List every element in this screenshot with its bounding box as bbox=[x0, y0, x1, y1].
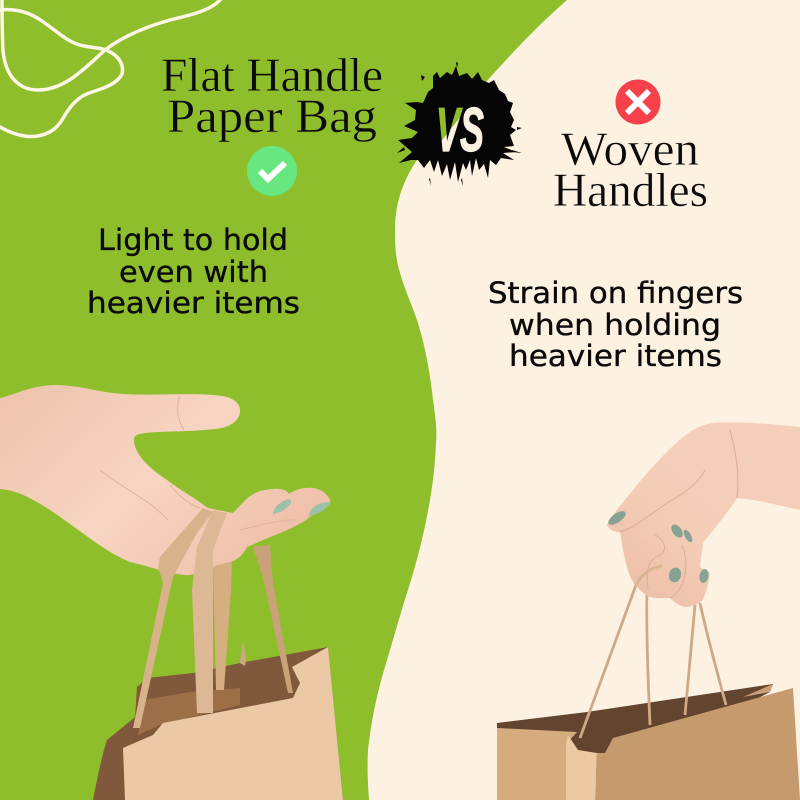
rope handles bbox=[580, 585, 726, 738]
bag interior bbox=[93, 647, 343, 800]
back flap sliver bbox=[743, 684, 773, 697]
text: flat handle benefit: even with bbox=[119, 255, 268, 289]
hand right bbox=[607, 422, 800, 607]
front strap bbox=[133, 508, 213, 728]
heading: Flat Handle Paper Bag: Flat Handle bbox=[161, 49, 383, 102]
hand left bbox=[0, 385, 330, 575]
left side panel bbox=[497, 728, 577, 800]
text: flat handle benefit: heavier items bbox=[87, 286, 300, 320]
ink flecks bbox=[397, 62, 522, 186]
icon: red cross badge bbox=[616, 80, 660, 124]
nails left hand bbox=[273, 499, 331, 516]
heading: Flat Handle Paper Bag: Paper Bag bbox=[167, 90, 377, 143]
nails right hand bbox=[606, 509, 710, 584]
text: flat handle benefit: Light to hold bbox=[98, 223, 288, 257]
text: woven handle drawback bbox=[488, 276, 743, 373]
rope loop over fingers bbox=[636, 566, 662, 585]
hand shading lines bbox=[620, 430, 738, 598]
VS ink splat badge bbox=[397, 62, 522, 186]
decorative squiggle lines bbox=[0, 0, 220, 136]
heading: Woven Handles bbox=[553, 123, 708, 217]
back flap tab bbox=[240, 640, 246, 666]
text: woven handle drawback: heavier items bbox=[509, 339, 722, 373]
icon: green check badge bbox=[247, 146, 297, 196]
right strap bbox=[253, 545, 293, 693]
text: woven handle drawback: when holding bbox=[509, 308, 721, 342]
heading: Woven Handles: Woven bbox=[561, 123, 699, 176]
heading: Flat Handle Paper Bag bbox=[161, 49, 383, 143]
photo: hand holding woven handle bag bbox=[497, 422, 800, 800]
ink splat bbox=[398, 66, 516, 182]
VS lettering: VS bbox=[436, 96, 484, 165]
hand creases bbox=[100, 396, 296, 530]
text: woven handle drawback: Strain on fingers bbox=[488, 276, 743, 310]
text: flat handle benefit bbox=[87, 223, 300, 320]
bag front panel bbox=[123, 647, 343, 800]
near corner fold bbox=[566, 735, 597, 800]
back strap bbox=[213, 560, 232, 690]
heading: Woven Handles: Handles bbox=[553, 164, 708, 217]
centre strap bbox=[192, 510, 227, 713]
background: green wavy panel bbox=[0, 0, 567, 800]
bag front panel bbox=[595, 688, 800, 800]
bag inner lighter wall bbox=[138, 688, 240, 735]
photo: hand holding flat handle bag bbox=[0, 385, 343, 800]
bag interior bbox=[497, 684, 773, 780]
